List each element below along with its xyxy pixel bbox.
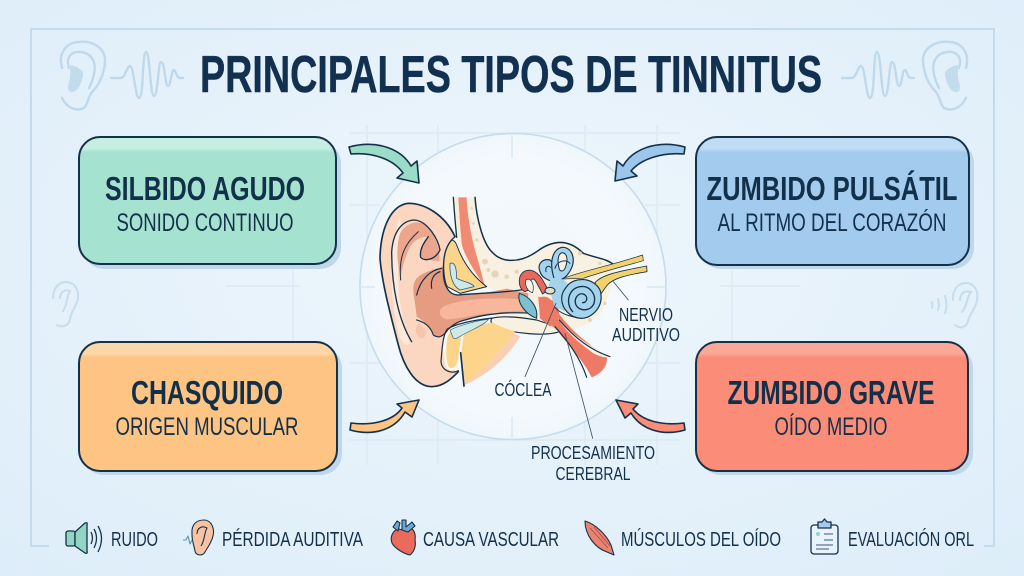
- canal lines: [443, 237, 528, 295]
- vessel: [458, 197, 485, 287]
- Eustachian tube: [538, 297, 607, 377]
- icon: sound wave top left: [111, 52, 183, 98]
- upper fossa: [397, 222, 439, 277]
- oval window: [545, 287, 555, 294]
- helix highlight: [391, 217, 410, 345]
- heading: silbido agudo: SILBIDO AGUDO: [105, 170, 305, 207]
- outer ear: [380, 203, 528, 387]
- upper cartilage: [443, 240, 487, 293]
- legend: causa vascular: [391, 520, 559, 555]
- arrow: red: [616, 400, 685, 432]
- icon: clipboard: [811, 519, 838, 554]
- text: al ritmo del corazon: AL RITMO DEL CORAZÓN: [718, 208, 946, 237]
- text: musculos del oido: MÚSCULOS DEL OÍDO: [621, 528, 781, 551]
- legend: perdida auditiva: [183, 520, 364, 555]
- label: nervio auditivo: AUDITIVO: [612, 325, 680, 345]
- vestibule: [548, 278, 568, 312]
- label: procesamiento cerebral: PROCESAMIENTO: [531, 443, 655, 463]
- heading: chasquido: CHASQUIDO: [131, 374, 283, 411]
- pointer: procesamiento: [565, 333, 593, 438]
- icon: ear top right: [923, 42, 967, 109]
- icon: small ear right with sound: [932, 283, 977, 327]
- canals: [539, 260, 554, 282]
- temporal bone: [453, 197, 614, 333]
- arrow: blue: [615, 144, 685, 181]
- ear drum: [519, 293, 537, 318]
- nerves: [595, 266, 647, 296]
- icon: small ear left: [53, 282, 78, 326]
- icon: speaker: [66, 523, 102, 553]
- icon: ear with wave: [183, 520, 214, 555]
- cochlea: [562, 280, 601, 318]
- icon: ear top left: [61, 42, 105, 109]
- legend: musculos del oido: [585, 521, 781, 555]
- legend: evaluacion orl: [811, 519, 974, 554]
- text: oido medio: OÍDO MEDIO: [774, 412, 888, 441]
- ossicles: [519, 270, 548, 294]
- pointer: coclea: [525, 303, 556, 377]
- panel: chasquido: [79, 342, 342, 475]
- panel: silbido agudo: [79, 137, 341, 269]
- panel: zumbido grave: [696, 342, 973, 475]
- central circle: [360, 134, 666, 440]
- icon: sound wave top right: [842, 52, 914, 98]
- ear folds: [392, 220, 440, 342]
- concha: [413, 267, 528, 337]
- heading: zumbido grave: ZUMBIDO GRAVE: [728, 374, 934, 411]
- ear outline: [380, 203, 458, 387]
- lower bone: [491, 317, 560, 334]
- inner ear: [539, 247, 647, 318]
- legend: ruido: [66, 523, 158, 553]
- text: evaluacion orl: EVALUACIÓN ORL: [848, 528, 974, 551]
- arrow: orange: [350, 400, 419, 432]
- label: nervio auditivo: NERVIO: [619, 305, 673, 325]
- pointer: nervio auditivo: [613, 282, 628, 300]
- label: procesamiento cerebral: [531, 443, 655, 484]
- text: causa vascular: CAUSA VASCULAR: [423, 529, 559, 551]
- text: sonido continuo: SONIDO CONTINUO: [116, 209, 294, 237]
- label: procesamiento cerebral: CEREBRAL: [556, 464, 630, 484]
- label: nervio auditivo: [612, 305, 680, 345]
- icon: muscle: [585, 521, 614, 555]
- panel: zumbido pulsatil: [696, 137, 974, 269]
- bone texture: [470, 207, 607, 329]
- label: coclea: CÓCLEA: [494, 379, 552, 400]
- ear canal light: [440, 298, 528, 319]
- icon: heart: [391, 520, 415, 555]
- ear anatomy illustration: [380, 197, 647, 438]
- lower cartilage bracket: [445, 330, 463, 369]
- heading: zumbido pulsatil: ZUMBIDO PULSÁTIL: [706, 170, 958, 207]
- arrow: green: [349, 144, 419, 183]
- text: origen muscular: ORIGEN MUSCULAR: [116, 413, 298, 441]
- text: perdida auditiva: PÉRDIDA AUDITIVA: [222, 528, 364, 551]
- text: ruido: RUIDO: [111, 529, 158, 551]
- lower soft tissue: [462, 323, 520, 385]
